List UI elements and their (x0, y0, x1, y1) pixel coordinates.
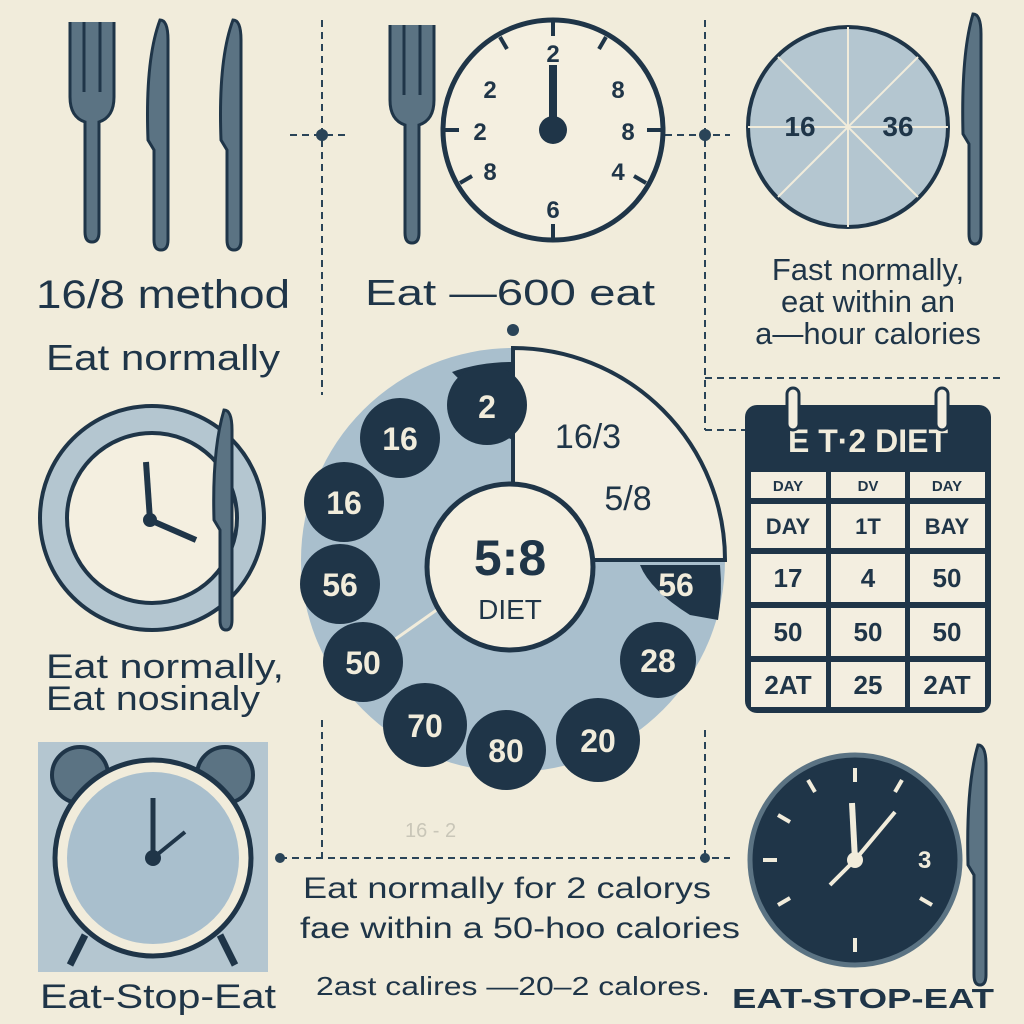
text: bottom center: 16 - 2 (405, 820, 456, 842)
icon: dark clock bottom-right: 3 (918, 847, 931, 874)
icon: calendar: E T·2 DIET (788, 423, 948, 459)
icon: clock top-center: 2 (483, 77, 497, 104)
text: eat normally left: Eat normally, (46, 648, 284, 686)
icon: calendar: DAY (932, 478, 962, 495)
icon: clock top-center: 6 (546, 197, 560, 224)
chart: 5:8 diet wheel: 5:8 (474, 530, 546, 586)
chart: 5:8 diet wheel: 56 (322, 567, 358, 603)
text: bottom center (300, 820, 740, 1001)
icon: clock top-center: 8 (611, 77, 625, 104)
chart: 5:8 diet wheel: 56 (658, 567, 694, 603)
chart: 5:8 diet wheel: 20 (580, 723, 616, 759)
icon: clock top-center: 4 (611, 159, 625, 186)
text: eat normally left: Eat nosinaly (46, 680, 260, 718)
icon: calendar: BAY (925, 514, 970, 539)
icon: fork and knives top-left (70, 20, 241, 250)
icon: clock top-center: 8 (483, 159, 497, 186)
text: fast normally: Fast normally, (772, 252, 964, 287)
icon: calendar: 17 (774, 563, 802, 593)
title: 16/8 method: 16/8 method (36, 273, 290, 317)
icon: calendar (745, 388, 991, 713)
title: eat-stop-eat right: EAT-STOP-EAT (732, 983, 994, 1014)
icon: knife top-right (963, 14, 981, 244)
text: fast normally (755, 252, 981, 351)
chart: 5:8 diet wheel: 70 (407, 708, 443, 744)
chart: 5:8 diet wheel: 16 (382, 421, 418, 457)
chart: 5:8 diet wheel: 16 (326, 485, 362, 521)
icon: calendar: DV (858, 478, 878, 495)
icon: plate clock left (40, 406, 264, 630)
icon: calendar: 2AT (764, 670, 812, 700)
icon: calendar: 1T (855, 514, 881, 539)
icon: calendar: 50 (774, 617, 802, 647)
text: bottom center: 2ast calires —20–2 calores. (316, 971, 710, 1001)
chart: 5:8 diet wheel: 16/3 (555, 418, 621, 456)
text: bottom center: fae within a 50-hoo calories (300, 912, 740, 945)
icon: calendar: DAY (773, 478, 803, 495)
text: eat normally: Eat normally (46, 337, 280, 378)
icon: clock top-center: 2 (546, 41, 560, 68)
icon: clock top-center (443, 20, 663, 240)
icon: calendar: 50 (933, 617, 961, 647)
chart: 5:8 diet wheel (300, 348, 725, 790)
chart: 5:8 diet wheel: 50 (345, 645, 381, 681)
text: eat normally left (46, 648, 284, 718)
icon: dark clock bottom-right (750, 745, 986, 985)
icon: fork top-center (390, 25, 434, 243)
text: eat 600: Eat —600 eat (365, 272, 655, 313)
icon: calendar: 2AT (923, 670, 971, 700)
title: eat-stop-eat left: Eat-Stop-Eat (40, 978, 277, 1016)
icon: calendar: 4 (861, 563, 876, 593)
text: fast normally: a—hour calories (755, 316, 981, 351)
icon: pie clock top-right (748, 27, 948, 227)
icon: calendar: 25 (854, 670, 882, 700)
text: fast normally: eat within an (781, 284, 955, 319)
icon: calendar: DAY (766, 514, 811, 539)
chart: 5:8 diet wheel: 2 (478, 389, 496, 425)
chart: 5:8 diet wheel: 28 (640, 643, 676, 679)
icon: clock top-center: 2 (473, 119, 487, 146)
chart: 5:8 diet wheel: 80 (488, 733, 524, 769)
icon: calendar: 50 (933, 563, 961, 593)
chart: 5:8 diet wheel: DIET (478, 594, 542, 625)
connector lines (280, 20, 1000, 860)
icon: clock top-center: 8 (621, 119, 635, 146)
icon: pie clock top-right: 36 (882, 111, 914, 142)
chart: 5:8 diet wheel: 5/8 (604, 480, 652, 518)
icon: calendar: 50 (854, 617, 882, 647)
icon: pie clock top-right: 16 (784, 111, 816, 142)
text: bottom center: Eat normally for 2 calorys (303, 872, 711, 905)
icon: alarm clock (38, 742, 268, 972)
